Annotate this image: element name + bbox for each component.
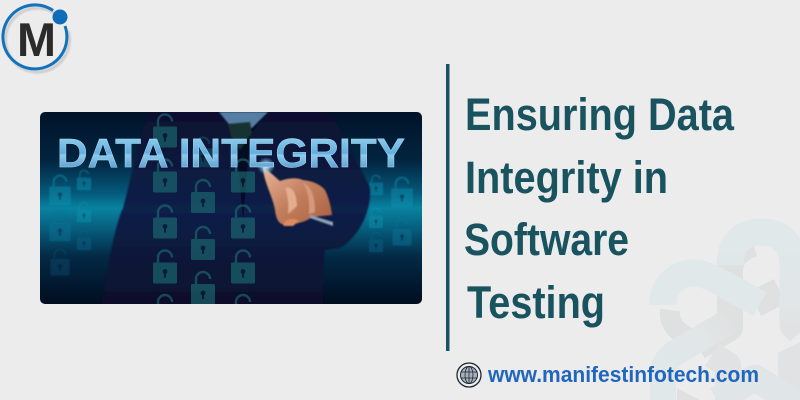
title: Ensuring Data	[465, 89, 735, 140]
central padlocks	[153, 113, 255, 304]
logo ring	[5, 8, 69, 72]
shirt and tie	[238, 115, 266, 218]
photo background	[40, 112, 422, 304]
title: Integrity in	[465, 152, 668, 203]
side padlocks	[49, 170, 413, 276]
title	[464, 89, 735, 328]
title: Software	[464, 214, 629, 265]
suit	[100, 108, 370, 310]
watermark logo	[663, 232, 800, 400]
website url: www.manifestinfotech.com	[487, 362, 759, 387]
divider line	[446, 64, 450, 351]
finger glow	[258, 158, 274, 174]
hand	[263, 167, 333, 226]
logo dot	[52, 10, 68, 24]
title: Testing	[467, 277, 605, 328]
logo	[3, 5, 69, 72]
headline in photo: DATA INTEGRITY	[57, 130, 405, 176]
icon: globe	[457, 363, 481, 387]
photo: data integrity	[40, 112, 422, 304]
logo letter: M	[17, 13, 56, 66]
